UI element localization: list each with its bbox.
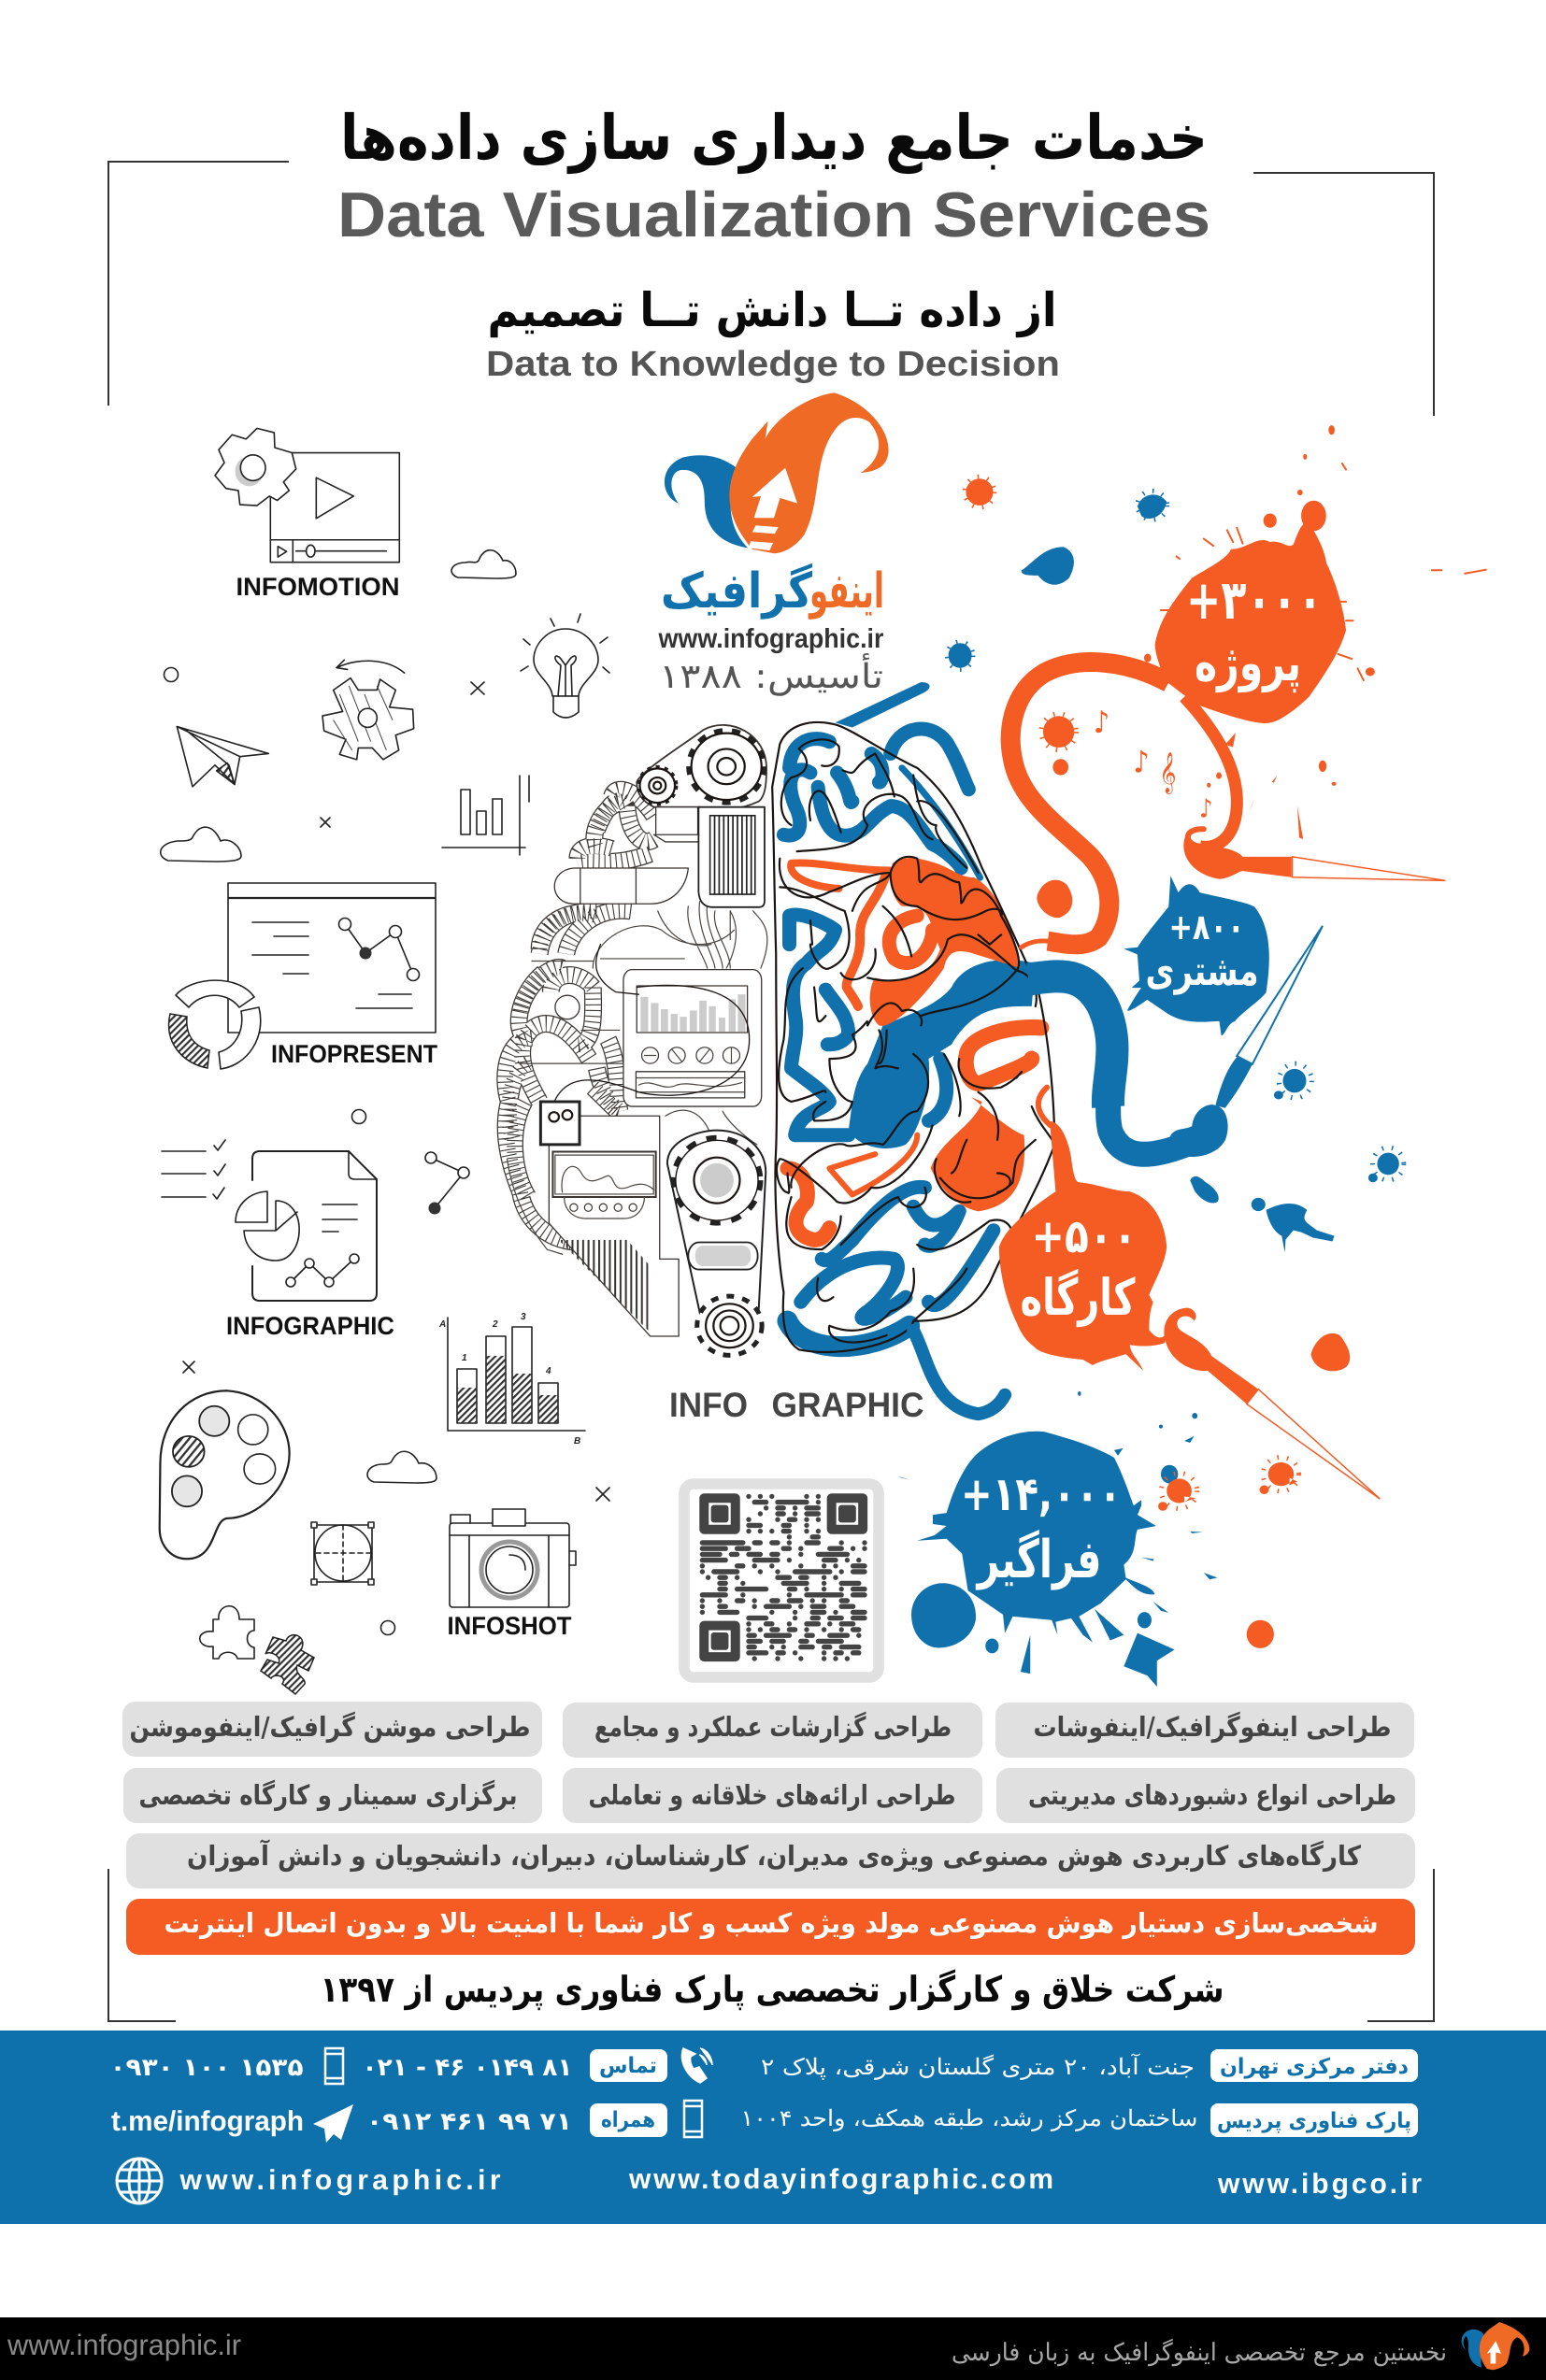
page frame — [108, 162, 1434, 2021]
monitor — [623, 970, 762, 1106]
icon: cloud — [161, 827, 241, 862]
label: INFO GRAPHIC: GRAPHIC — [772, 1386, 923, 1424]
blue paint splats — [949, 494, 1167, 668]
chip: infographic design: طراحی اینفوگرافیک/اینفوشات — [1034, 1711, 1391, 1744]
blue splash — [1124, 876, 1269, 1035]
pressure gauge — [555, 995, 580, 1019]
icon: vector circle — [311, 1522, 374, 1585]
stat: 3000 projects — [1186, 568, 1323, 693]
footer logo — [1462, 2322, 1529, 2370]
blue stream — [1028, 976, 1112, 1107]
chart: hatched 3D bars: B — [574, 1436, 580, 1447]
icon: small bar chart — [442, 776, 529, 855]
icon: cloud — [367, 1451, 437, 1483]
chip: seminars and workshops: برگزاری سمینار و کارگاه تخصصی — [138, 1779, 518, 1812]
phone number: ۰۲۱ - ۴۶ ۰۱۴۹ ۸۱ — [363, 2054, 572, 2082]
stat: 800 clients: +۸۰۰ — [1168, 906, 1245, 948]
music notes: ♪ — [1134, 745, 1150, 780]
icon: document with pie chart — [236, 1151, 377, 1301]
chip: Pardis park — [1210, 2103, 1418, 2137]
orange splash — [999, 1121, 1167, 1371]
icon: mobile — [684, 2101, 702, 2137]
footer tagline: نخستین مرجع تخصصی اینفوگرافیک به زبان فارسی — [952, 2338, 1447, 2367]
blue small splat — [1274, 1069, 1306, 1100]
icon: phone — [682, 2048, 712, 2083]
music notes — [1094, 705, 1212, 823]
orange brush 2 — [1164, 1308, 1258, 1404]
label: INFOMOTION: INFOMOTION — [236, 573, 400, 601]
services: AI assistant banner: شخصی‌سازی دستیار هوش مصنوعی مولد ویژه کسب و کار شما با امنیت بالا و بدون اتصال اینترنت — [165, 1907, 1378, 1940]
blue spill top — [836, 682, 930, 727]
brain fill — [772, 722, 1054, 1352]
stat: 500 workshops: +۵۰۰ — [1032, 1209, 1137, 1263]
address: Tehran: جنت آباد، ۲۰ متری گلستان شرقی، پلاک ۲ — [761, 2053, 1195, 2080]
icon: presentation window — [169, 883, 436, 1069]
stat: 14000 learners: +۱۴,۰۰۰ — [961, 1467, 1122, 1521]
icon: telegram plane — [313, 2104, 353, 2143]
subtitle: English: Data to Knowledge to Decision — [486, 345, 1060, 384]
chip: creative presentations — [563, 1768, 982, 1823]
services: row 1 — [122, 1702, 1414, 1758]
icon: globe — [117, 2159, 162, 2203]
icon: rotating gear — [322, 660, 414, 760]
logo: swoosh with arrow — [665, 392, 889, 553]
blue lower splash — [917, 1432, 1156, 1643]
label: INFOGRAPHIC: INFOGRAPHIC — [226, 1312, 394, 1340]
stat: 3000 projects: پروژه — [1195, 634, 1301, 693]
chip: dashboards — [996, 1768, 1415, 1823]
chip: contact: تماس — [599, 2054, 657, 2078]
blue brush — [1168, 1057, 1253, 1157]
orange swirl — [1010, 663, 1168, 945]
founded year: تأسیس: ۱۳۸۸ — [659, 653, 883, 696]
website link: www.ibgco.ir — [1217, 2169, 1422, 2200]
large blue band — [849, 960, 1036, 1148]
contact band — [0, 2031, 1546, 2224]
company statement: شرکت خلاق و کارگزار تخصصی پارک فناوری پردیس از ۱۳۹۷ — [321, 1969, 1224, 2011]
chart: hatched 3D bars: 3 — [521, 1312, 526, 1322]
mobile number 2: ۰۹۱۲ ۴۶۱ ۹۹ ۷۱ — [366, 2108, 572, 2136]
website link: www.infographic.ir — [179, 2165, 501, 2196]
services: AI workshops — [126, 1833, 1415, 1888]
orange splats — [1158, 1333, 1350, 1648]
telegram link: t.me/infograph — [111, 2106, 304, 2137]
chart: hatched 3D bars — [438, 1312, 585, 1447]
orange splats in swirl — [1037, 716, 1337, 918]
footer url: www.infographic.ir — [7, 2329, 241, 2361]
services: row 2 — [123, 1768, 1415, 1823]
chip: motion graphics design: طراحی موشن گرافیک/اینفوموشن — [129, 1711, 531, 1744]
icon: camera — [450, 1509, 576, 1607]
blue tail — [913, 1331, 1005, 1414]
label: INFOSHOT: INFOSHOT — [447, 1612, 572, 1640]
orange brush — [1183, 831, 1292, 879]
blue splats — [1078, 1153, 1399, 1483]
chart: hatched 3D bars: 4 — [545, 1366, 551, 1376]
icon: paint palette — [160, 1390, 290, 1559]
label: INFOPRESENT: INFOPRESENT — [271, 1040, 437, 1068]
music notes: 𝄞 — [1159, 751, 1177, 794]
right brain: painted half — [772, 682, 1054, 1414]
music notes: ♪ — [1199, 793, 1212, 823]
stat: 500 workshops — [1021, 1209, 1137, 1328]
icon: light bulb — [521, 614, 609, 718]
chip: dashboards: طراحی انواع دشبوردهای مدیریتی — [1028, 1779, 1396, 1812]
logo wordmark: اینفو — [808, 563, 884, 620]
chip: mobile: همراه — [601, 2108, 655, 2132]
stat: 800 clients — [1146, 906, 1258, 995]
QR code — [684, 1484, 879, 1677]
cables — [532, 911, 734, 968]
icon: network nodes — [425, 1152, 469, 1215]
grille box — [698, 807, 765, 907]
hoses — [506, 790, 654, 1242]
chip: mobile — [590, 2103, 667, 2137]
music notes: ♪ — [1094, 705, 1109, 740]
mobile number: ۰۹۳۰ ۱۰۰ ۱۵۳۵ — [110, 2054, 304, 2082]
icon: checklist — [162, 1140, 225, 1199]
stat: 14000 learners: فراگیر — [975, 1530, 1101, 1590]
chip: motion graphics design — [122, 1702, 542, 1757]
black gyri outlines — [772, 722, 1054, 1352]
icon: cloud — [451, 550, 516, 578]
chip: seminars and workshops — [123, 1768, 542, 1823]
chip: performance reports — [563, 1703, 982, 1758]
lower control panel — [549, 1116, 679, 1336]
footer bar — [0, 2317, 1546, 2380]
subtitle: Persian: از داده تــا دانش تــا تصمیم — [488, 283, 1056, 338]
services: AI assistant banner — [126, 1899, 1415, 1955]
capsule and pipes — [554, 868, 688, 904]
orange paint stream and top splash — [947, 425, 1486, 1157]
left brain: mechanical half — [506, 725, 767, 1355]
stat: 800 clients: مشتری — [1146, 948, 1258, 995]
chip: performance reports: طراحی گزارشات عملکرد و مجامع — [594, 1711, 952, 1744]
title: English: Data Visualization Services — [337, 179, 1210, 250]
label: INFO GRAPHIC — [669, 1386, 923, 1424]
blue strokes — [783, 729, 994, 1347]
chart: hatched 3D bars: 1 — [462, 1353, 467, 1363]
stat: 500 workshops: کارگاه — [1021, 1268, 1136, 1328]
logo url: www.infographic.ir — [658, 624, 884, 654]
address: Pardis: ساختمان مرکز رشد، طبقه همکف، واحد ۱۰۰۴ — [741, 2105, 1198, 2131]
chip: Tehran office: دفتر مرکزی تهران — [1220, 2055, 1409, 2079]
stat: 14000 learners — [961, 1467, 1122, 1590]
icon: mobile — [325, 2048, 343, 2084]
chip: Pardis park: پارک فناوری پردیس — [1217, 2109, 1411, 2133]
orange strokes — [787, 862, 1051, 1240]
chip: infographic design — [995, 1703, 1414, 1758]
chip: creative presentations: طراحی ارائه‌های خلاقانه و تعاملی — [589, 1779, 955, 1812]
chart: hatched 3D bars: A — [438, 1319, 446, 1330]
icon: paper plane — [177, 727, 268, 787]
label: INFO GRAPHIC: INFO — [669, 1386, 748, 1424]
lower gears and belt — [667, 1131, 766, 1343]
chip: contact — [590, 2049, 667, 2082]
chart: hatched 3D bars: 2 — [492, 1319, 498, 1330]
lower paint: orange and blue splashes — [897, 1121, 1404, 1687]
stat: 3000 projects: +۳۰۰۰ — [1186, 568, 1323, 632]
website link: www.todayinfographic.com — [628, 2164, 1053, 2195]
title: Persian: خدمات جامع دیداری سازی داده‌ها — [340, 102, 1208, 175]
decorative marks — [165, 667, 609, 1635]
top gears and belt — [637, 725, 766, 809]
icon: puzzle pieces — [200, 1606, 314, 1694]
logo wordmark: گرافیک — [661, 563, 813, 620]
icon: video with gear — [215, 428, 399, 563]
services: AI workshops: کارگاه‌های کاربردی هوش مصنوعی ویژه‌ی مدیران، کارشناسان، دبیران، دانشجویان و دانش آموزان — [187, 1839, 1361, 1873]
